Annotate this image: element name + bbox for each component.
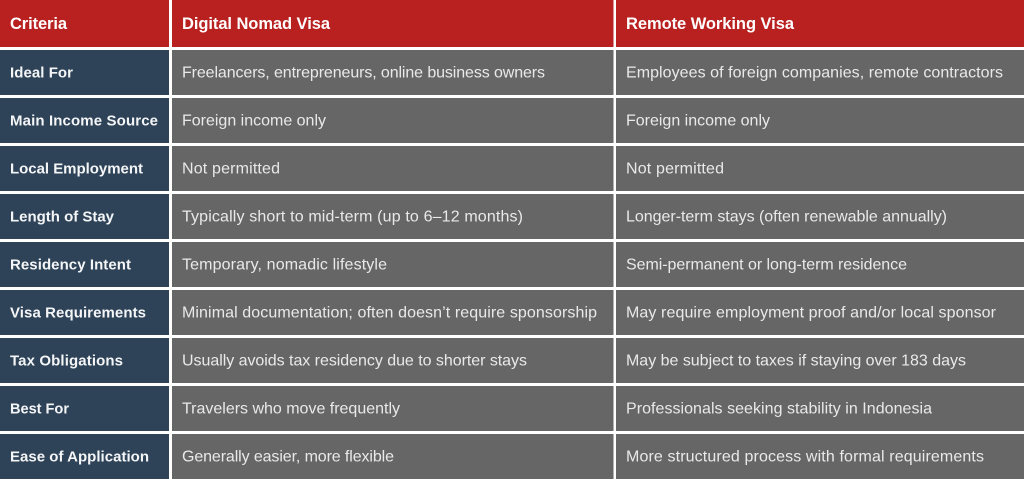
row: Best For: Professionals seeking stability in Indonesia bbox=[626, 400, 932, 418]
row: Residency Intent: Residency Intent bbox=[10, 256, 131, 274]
row: Length of Stay: Length of Stay bbox=[10, 208, 115, 226]
header row: Remote Working Visa bbox=[626, 15, 795, 33]
row: Visa Requirements: May require employment proof and/or local sponsor bbox=[626, 304, 997, 322]
row: Tax Obligations: May be subject to taxes if staying over 183 days bbox=[626, 352, 966, 370]
row: Ideal For: Freelancers, entrepreneurs, online business owners bbox=[182, 64, 545, 82]
row: Length of Stay: Longer-term stays (often renewable annually) bbox=[626, 208, 947, 226]
row: Main Income Source: Foreign income only bbox=[182, 112, 326, 130]
header row: Digital Nomad Visa bbox=[182, 15, 331, 33]
row: Best For: Travelers who move frequently bbox=[182, 400, 400, 418]
row: Best For: Best For bbox=[10, 402, 69, 418]
row: Ideal For: Ideal For bbox=[10, 64, 73, 82]
row: Local Employment: Not permitted bbox=[626, 160, 724, 178]
row: Tax Obligations bbox=[0, 338, 1024, 383]
row: Ease of Application: Generally easier, more flexible bbox=[182, 448, 394, 466]
row: Length of Stay bbox=[0, 194, 1024, 239]
row: Best For bbox=[0, 386, 1024, 431]
row: Ease of Application: Ease of Application bbox=[10, 448, 149, 466]
row: Main Income Source: Foreign income only bbox=[626, 112, 770, 130]
row: Visa Requirements bbox=[0, 290, 1024, 335]
row: Local Employment bbox=[0, 146, 1024, 191]
row: Residency Intent bbox=[0, 242, 1024, 287]
row: Local Employment: Not permitted bbox=[182, 160, 280, 178]
row: Residency Intent: Temporary, nomadic lifestyle bbox=[182, 256, 387, 274]
header row: Criteria bbox=[10, 15, 68, 33]
row: Main Income Source: Main Income Source bbox=[10, 112, 158, 130]
row: Length of Stay: Typically short to mid-term (up to 6–12 months) bbox=[182, 208, 523, 226]
row: Local Employment: Local Employment bbox=[10, 160, 143, 178]
header row bbox=[0, 0, 1024, 47]
row: Ease of Application: More structured process with formal requirements bbox=[626, 448, 984, 466]
row: Main Income Source bbox=[0, 98, 1024, 143]
row: Residency Intent: Semi-permanent or long-term residence bbox=[626, 256, 907, 274]
row: Visa Requirements: Minimal documentation; often doesn’t require sponsorship bbox=[182, 304, 597, 322]
row: Tax Obligations: Usually avoids tax residency due to shorter stays bbox=[182, 352, 527, 370]
row: Ideal For bbox=[0, 50, 1024, 95]
row: Visa Requirements: Visa Requirements bbox=[10, 304, 146, 322]
row: Ease of Application bbox=[0, 434, 1024, 479]
row: Tax Obligations: Tax Obligations bbox=[10, 352, 123, 370]
row: Ideal For: Employees of foreign companies, remote contractors bbox=[626, 64, 1003, 82]
